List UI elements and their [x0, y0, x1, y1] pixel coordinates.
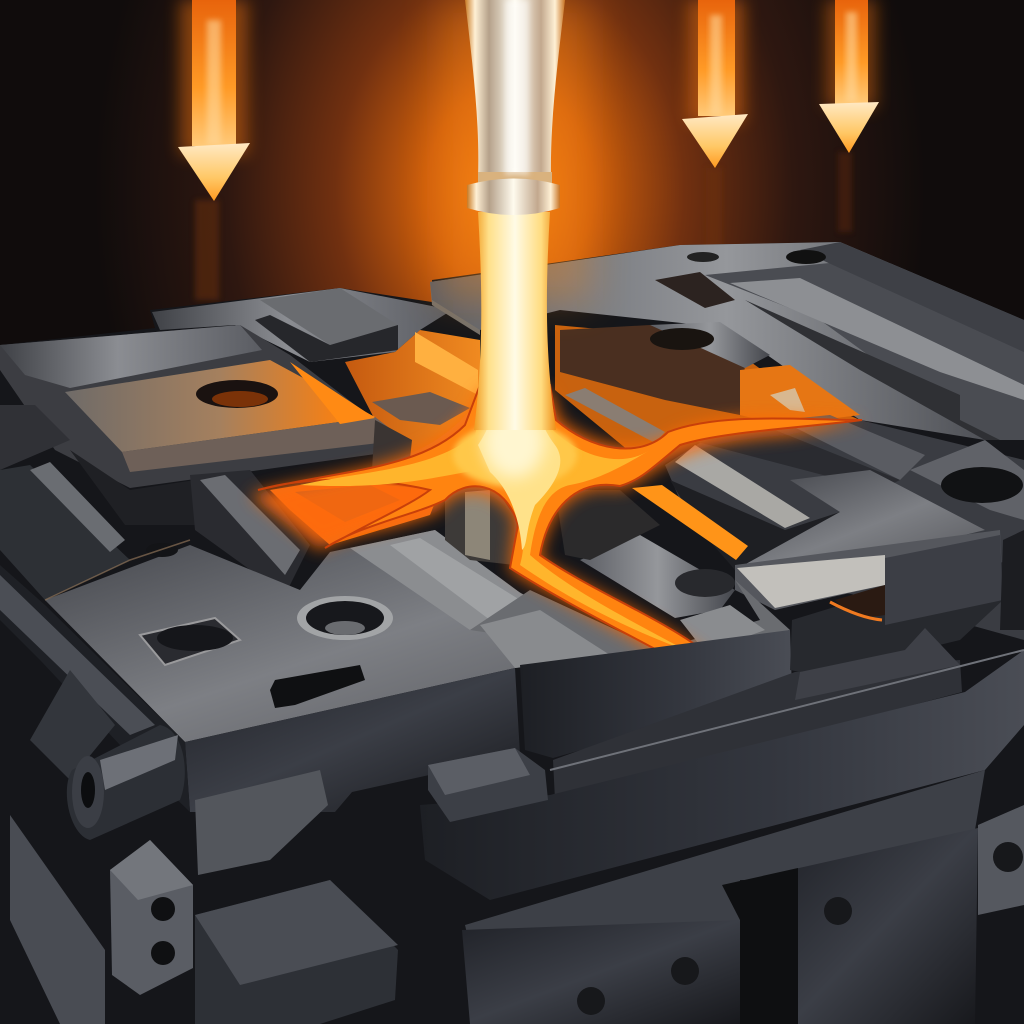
mold base body — [0, 242, 1024, 1024]
nozzle with collar and molten stem — [440, 0, 590, 430]
panel: orange lit cavity left — [345, 275, 480, 480]
panel: front face of center plate — [520, 630, 792, 758]
panel: top right plate — [430, 242, 1024, 440]
panel: lower left hinge and roller — [30, 670, 185, 840]
molten metal: runners — [258, 385, 862, 656]
panel: top left plate — [0, 325, 412, 488]
arrow: middle right — [682, 0, 748, 248]
panel: left molten cavity — [270, 480, 440, 545]
panel: bottom front block — [462, 770, 1024, 1024]
arrow: far right — [819, 0, 879, 232]
panel: center front plate — [470, 535, 790, 668]
panel: back left raised blocks — [152, 288, 452, 362]
molten metal: outer glow — [250, 390, 865, 660]
panel: right stepped steel blocks — [665, 415, 1024, 640]
panel: front face of lower left plate — [0, 565, 520, 812]
panel: bottom left blocks — [10, 815, 398, 1024]
panel: right inner cavity — [555, 322, 860, 460]
panel: stepped rails below center — [420, 628, 1024, 900]
panel: left flank and stepped blocks — [0, 405, 310, 600]
arrow: left — [178, 0, 250, 300]
panel: lower left plate — [0, 530, 640, 742]
panel: right lower block — [790, 530, 1024, 675]
panel: wedge under left plate — [195, 770, 328, 875]
center cavity pockets — [445, 480, 660, 565]
